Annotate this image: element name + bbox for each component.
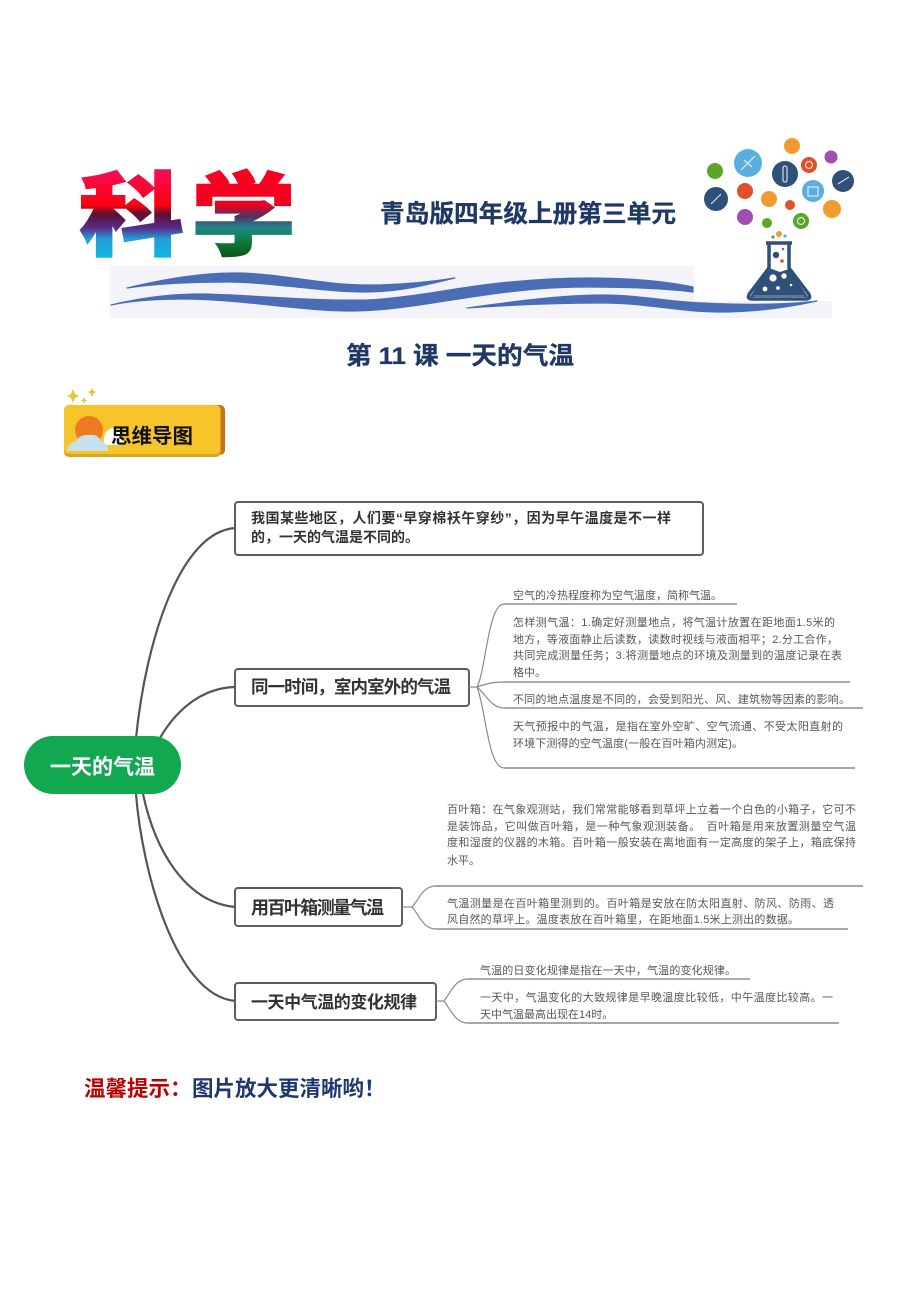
lesson title: 第 11 课 一天的气温 — [346, 342, 574, 370]
text: louver box: 百叶箱：在气象观测站，我们常常能够看到草坪上立着一个白色的小箱子，它可不 — [447, 802, 856, 816]
text: louver box — [447, 802, 856, 867]
branches of node 3 — [402, 886, 863, 929]
text: daily variation: 气温的日变化规律是指在一天中，气温的变化规律。 — [480, 963, 736, 977]
badge: 思维导图: 思维导图 — [111, 425, 193, 448]
text: pattern: 天中气温最高出现在14时。 — [480, 1007, 613, 1021]
text: weather forecast — [513, 719, 843, 750]
icon: flask — [748, 243, 810, 299]
node 1: 的，一天的气温是不同的。 — [251, 529, 419, 545]
text: how to measure: 格中。 — [513, 665, 546, 679]
footer tip: 温馨提示： — [84, 1077, 192, 1101]
icon: science bubbles — [704, 138, 854, 239]
text: louver box: 水平。 — [447, 854, 480, 867]
banner background — [110, 266, 832, 318]
node 2 — [235, 669, 469, 706]
text: measuring in louver box — [447, 896, 834, 926]
text: how to measure: 怎样测气温：1.确定好测量地点，将气温计放置在距地面1.5米的 — [513, 615, 835, 629]
footer tip — [84, 1077, 386, 1101]
footer tip: 图片放大更清晰哟！ — [192, 1077, 386, 1101]
central node: 一天的气温 — [50, 756, 155, 779]
logo: 科学: 科 — [79, 167, 184, 268]
node 2: 同一时间，室内室外的气温 — [251, 677, 451, 697]
node 4 — [235, 983, 436, 1020]
text: louver box: 度和湿度的仪器的木箱。百叶箱一般安装在离地面有一定高度的架子上，箱底保持 — [447, 835, 856, 849]
badge: 思维导图 — [64, 388, 225, 457]
text: air temperature definition: 空气的冷热程度称为空气温度，简称气温。 — [513, 588, 722, 602]
subtitle: 青岛版四年级上册第三单元 — [380, 200, 676, 228]
text: how to measure — [513, 615, 842, 679]
node 1: 我国某些地区，人们要“早穿棉袄午穿纱”，因为早午温度是不一样 — [251, 510, 671, 526]
text: factors: 不同的地点温度是不同的，会受到阳光、风、建筑物等因素的影响。 — [513, 692, 850, 706]
logo: 科学: 学 — [191, 167, 296, 268]
text: weather forecast: 环境下测得的空气温度(一般在百叶箱内测定)。 — [513, 736, 743, 750]
text: pattern: 一天中，气温变化的大致规律是早晚温度比较低，中午温度比较高。一 — [480, 990, 833, 1004]
text: weather forecast: 天气预报中的气温，是指在室外空旷、空气流通、不受太阳直射的 — [513, 719, 843, 733]
branches of node 2 — [469, 604, 863, 768]
central node — [24, 736, 181, 794]
node 3 — [235, 888, 402, 926]
branches of node 4 — [436, 979, 839, 1023]
text: how to measure: 共同完成测量任务；3.将测量地点的环境及测量到的温度记录在表 — [513, 648, 842, 662]
logo: 科学 — [79, 167, 296, 268]
text: measuring in louver box: 风自然的草坪上。温度表放在百叶箱里，在距地面1.5米上测出的数据。 — [447, 912, 799, 926]
node 3: 用百叶箱测量气温 — [251, 898, 384, 918]
node 4: 一天中气温的变化规律 — [251, 992, 417, 1012]
text: louver box: 是装饰品，它叫做百叶箱，是一种气象观测装备。 百叶箱是用来放置测量空气温 — [447, 819, 856, 833]
text: measuring in louver box: 气温测量是在百叶箱里测到的。百叶箱是安放在防太阳直射、防风、防雨、透 — [447, 896, 834, 910]
sparkles — [67, 388, 96, 404]
node 1 — [235, 502, 703, 555]
connector: main branches — [136, 528, 235, 1001]
waves — [111, 273, 817, 312]
text: how to measure: 地方，等液面静止后读数，读数时视线与液面相平；2.分工合作， — [513, 632, 838, 646]
text: pattern — [480, 990, 833, 1021]
